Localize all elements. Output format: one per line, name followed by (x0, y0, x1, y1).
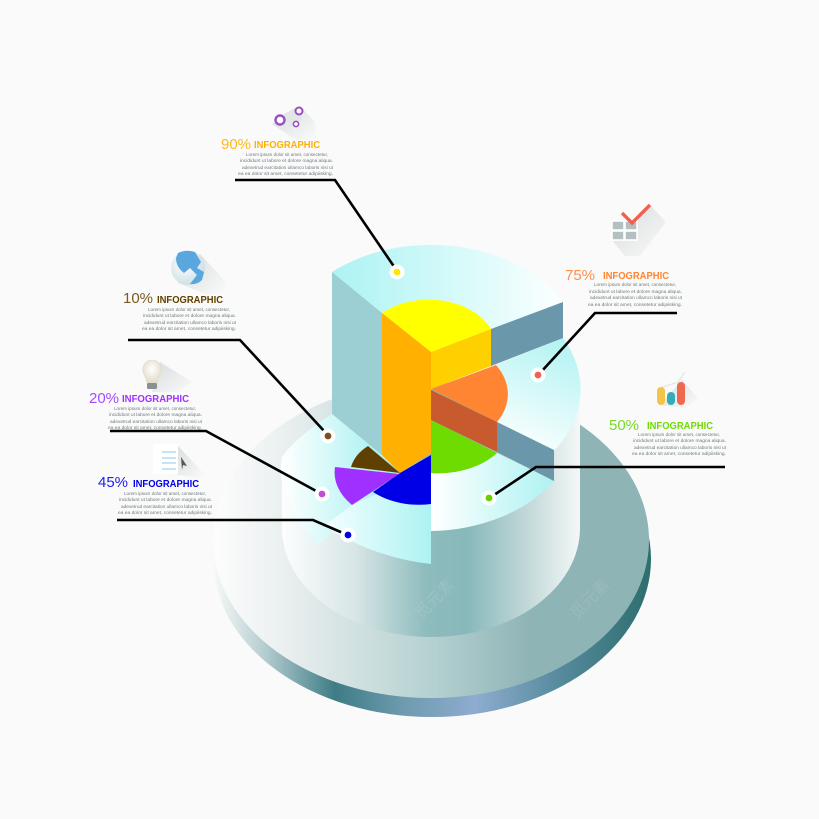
body text: ea ea dolor sit amet, consetetur adipiisking. (588, 302, 682, 307)
body text: ea ea dolor sit amet, consetetur adipiisking. (118, 510, 212, 515)
body text: incididunt ut labore et dolore magna aliqua. (143, 313, 236, 318)
base side wall (213, 401, 651, 717)
middle cylinder wall (282, 390, 580, 637)
body text: ea ea dolor sit amet, consetetur adipiisking. (142, 326, 236, 331)
body text: adexetrud earcitation ullamco laboris nisi ut (242, 165, 334, 170)
marker (390, 264, 404, 280)
watermarks: 觅元素 (412, 576, 458, 623)
body text (238, 152, 334, 176)
body text (118, 491, 213, 515)
body text: ea ea dolor sit amet, consetetur adipiisking. (632, 451, 726, 456)
marker (530, 368, 546, 382)
body text: adexetrud earcitation ullamco laboris nisi ut (590, 295, 683, 300)
marker (320, 428, 336, 444)
body text: incididunt ut labore et dolore magna aliqua. (240, 158, 333, 163)
body text (108, 406, 203, 430)
body text: adexetrud earcitation ullamco laboris nisi ut (144, 320, 237, 325)
body text: Lorem ipsum dolor sit amet, consectetur, (124, 491, 206, 496)
body text (142, 307, 237, 331)
amber wall (382, 313, 431, 473)
callout: 10% (123, 251, 336, 444)
body text: incididunt ut labore et dolore magna aliqua. (119, 497, 212, 502)
leader line (494, 467, 725, 495)
value: 75% (565, 267, 595, 284)
watermarks: 觅元素 (567, 576, 613, 623)
green wedge (431, 420, 497, 473)
yellow wedge top (382, 300, 491, 352)
icon: gears (272, 106, 316, 140)
leader line (235, 180, 395, 268)
yellow wedge wall (431, 329, 491, 389)
callout: 90% (221, 106, 404, 280)
body text: ea ea dolor sit amet, consetetur adipiisking. (238, 171, 333, 176)
base disc (213, 382, 651, 717)
icon: bar chart (657, 372, 698, 408)
marker (314, 486, 330, 502)
body text: Lorem ipsum dolor sit amet, consectetur, (114, 406, 196, 411)
icon: light bulb (143, 360, 192, 392)
leader line (128, 340, 325, 432)
value: 90% (221, 136, 251, 153)
icon: globe (171, 251, 226, 294)
3D pie chart (281, 245, 581, 564)
callout: 75% (530, 205, 683, 382)
marker (340, 528, 356, 542)
body text: incididunt ut labore et dolore magna aliqua. (589, 289, 682, 294)
leader line (110, 431, 318, 492)
slice 75%: top surface (496, 338, 581, 451)
body text: Lorem ipsum dolor sit amet, consectetur, (594, 282, 676, 287)
value: 20% (89, 390, 119, 407)
body text: adexetrud earcitation ullamco laboris nisi ut (110, 419, 203, 424)
slice 50%: top surface (431, 453, 554, 531)
callout: 50% (482, 372, 727, 506)
brown wedge (351, 446, 400, 473)
heading: INFOGRAPHIC (133, 479, 199, 490)
marker (482, 490, 496, 506)
heading: INFOGRAPHIC (254, 140, 320, 151)
body text: adexetrud earcitation ullamco laboris nisi ut (121, 504, 213, 509)
slice 20%: top surface (281, 414, 400, 545)
body text (588, 282, 683, 307)
body text: ea ea dolor sit amet, consetetur adipiisking. (108, 425, 202, 430)
heading: INFOGRAPHIC (603, 271, 669, 282)
callout: 45% (98, 444, 356, 542)
heading: INFOGRAPHIC (647, 421, 713, 432)
base top surface (213, 382, 649, 698)
purple wedge (335, 467, 399, 505)
wall: blue-grey upper (491, 302, 563, 366)
body text: incididunt ut labore et dolore magna aliqua. (109, 412, 202, 417)
watermarks (412, 576, 613, 623)
callout: 20% (89, 360, 330, 502)
icon: document and cursor (153, 444, 206, 478)
body text: Lorem ipsum dolor sit amet, consectetur, (246, 152, 328, 157)
heading: INFOGRAPHIC (122, 394, 189, 405)
orange wedge top (431, 365, 508, 422)
body text: incididunt ut labore et dolore magna aliqua. (633, 438, 726, 443)
body text: adexetrud earcitation ullamco laboris nisi ut (634, 445, 727, 450)
value: 45% (98, 474, 128, 491)
body text: Lorem ipsum dolor sit amet, consectetur, (638, 432, 720, 437)
value: 10% (123, 290, 153, 307)
leader line (541, 313, 677, 372)
slice 90%: left wall (332, 272, 382, 456)
slice 90%: top surface (332, 245, 563, 329)
icon: checkmark and grid (612, 205, 666, 256)
wall: blue-grey lower (497, 422, 554, 481)
blue wedge (373, 455, 431, 505)
body text (632, 432, 727, 456)
leader line (117, 520, 343, 533)
heading: INFOGRAPHIC (157, 295, 223, 306)
slice 45%: top surface (324, 470, 431, 564)
value: 50% (609, 417, 639, 434)
body text: Lorem ipsum dolor sit amet, consectetur, (148, 307, 230, 312)
orange wedge wall (431, 390, 497, 452)
